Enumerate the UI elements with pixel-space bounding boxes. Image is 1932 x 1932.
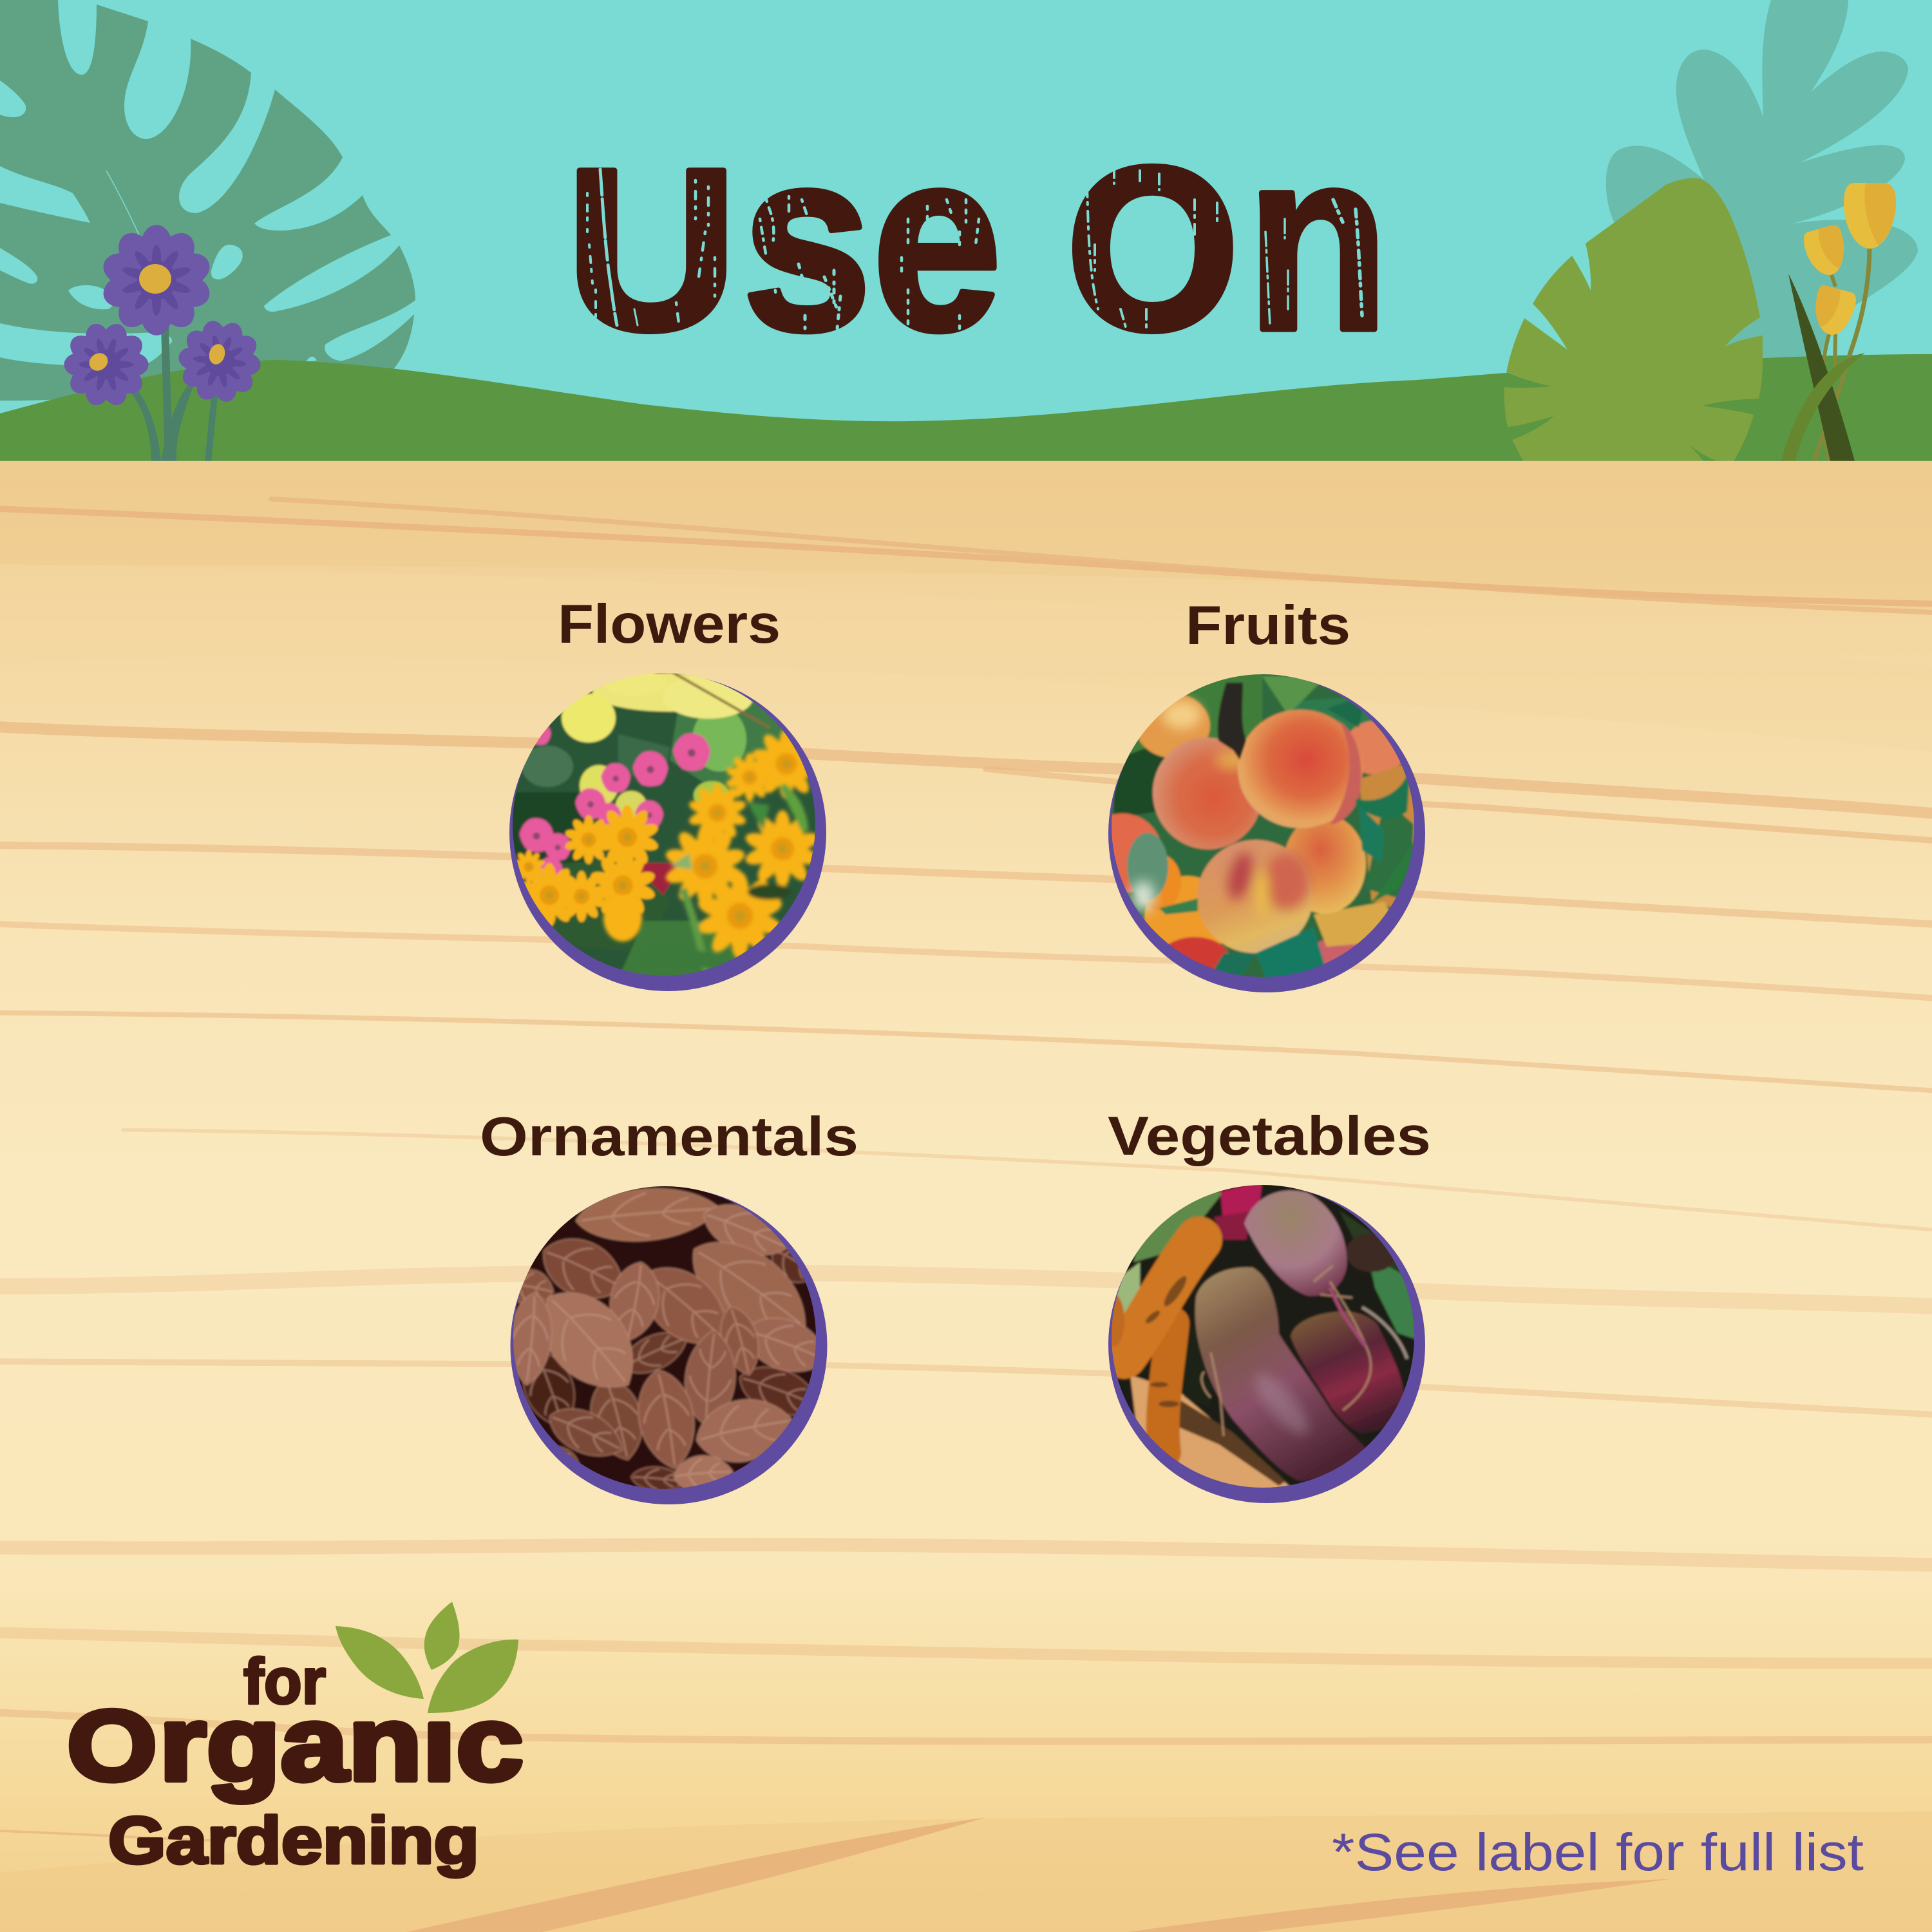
photo ring: vegetables <box>1104 1182 1425 1507</box>
illustration: back teal plant <box>1606 0 1918 386</box>
logo text: Gardening: Gardening <box>108 1803 479 1877</box>
olive leaf <box>1781 353 1865 461</box>
logo text: Organic: rganic <box>159 1684 524 1803</box>
small flower left <box>52 311 161 418</box>
title <box>565 96 1389 384</box>
label: Fruits: Fruits <box>1186 595 1350 656</box>
photo ring: flowers <box>502 663 831 992</box>
photo ring: ornamentals <box>506 1182 836 1504</box>
illustration: green banana leaf <box>1504 178 1763 461</box>
photo ring: fruits <box>1083 670 1425 992</box>
illustration: monstera leaf <box>0 0 415 422</box>
footnote: *See label for full list <box>1332 1823 1864 1882</box>
large flower <box>99 225 214 336</box>
photo: bronze leaves <box>513 1186 816 1489</box>
big tulip <box>1844 183 1896 249</box>
title: n <box>1246 96 1389 384</box>
small flower right <box>169 312 270 410</box>
wood background panel <box>0 461 1932 1932</box>
label: Ornamentals: Ornamentals <box>480 1106 858 1168</box>
photo: peaches <box>1112 674 1414 977</box>
logo: for Organic Gardening <box>67 1602 524 1877</box>
title: U <box>565 120 738 378</box>
tulip stems <box>1814 249 1870 461</box>
logo text: for: for <box>243 1645 326 1718</box>
small flower left centre <box>86 350 111 374</box>
label: Vegetables: Vegetables <box>1108 1106 1431 1167</box>
photo: flowers garden <box>513 673 815 976</box>
logo text: Organic: O <box>67 1690 157 1801</box>
small flower right centre <box>207 342 227 366</box>
title: se <box>742 96 1002 384</box>
small upper tulip <box>1804 225 1844 275</box>
dark leaf <box>1788 274 1855 461</box>
header: sky background <box>0 0 1932 464</box>
large flower centre <box>139 264 171 294</box>
photo: carrots and beets <box>1112 1185 1414 1488</box>
header: green hill <box>0 354 1932 464</box>
illustration: yellow tulips <box>1781 183 1896 461</box>
flower stems <box>126 325 218 461</box>
title: O <box>1066 118 1240 379</box>
label: Flowers: Flowers <box>558 594 781 655</box>
small lower tulip <box>1816 285 1856 335</box>
illustration: purple flowers <box>52 225 270 461</box>
logo leaves <box>336 1602 518 1713</box>
